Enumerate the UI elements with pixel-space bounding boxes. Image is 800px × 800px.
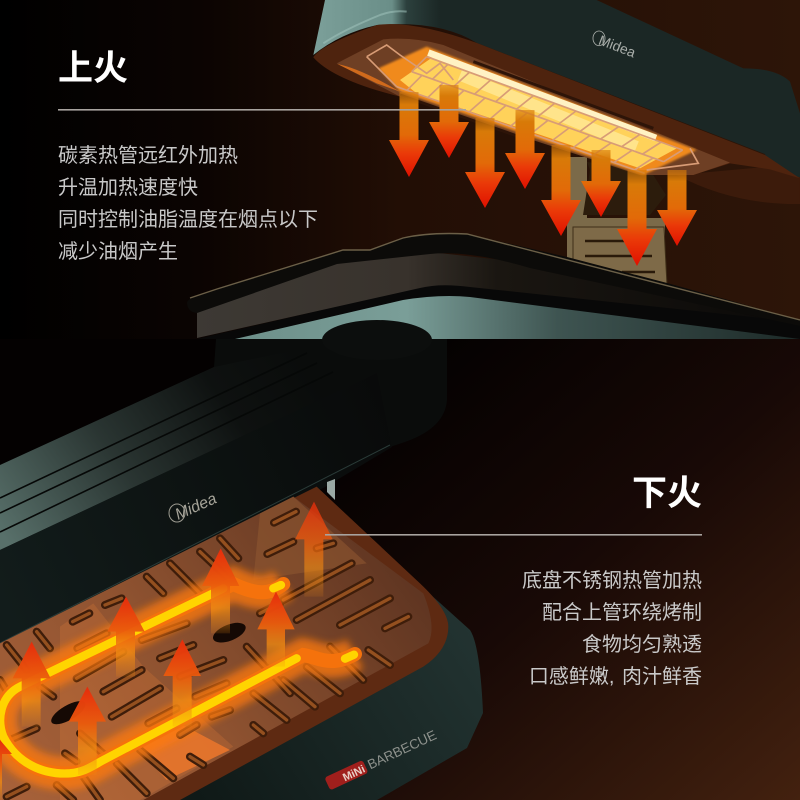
text block: upper description — [58, 144, 318, 263]
logo: Midea: Midea — [173, 490, 220, 524]
heating tube glow — [0, 584, 355, 773]
heater glow — [378, 47, 697, 175]
slots highlight — [0, 512, 408, 800]
text block: lower description: 配合上管环绕烤制 — [542, 601, 702, 624]
background: upper panel — [0, 0, 800, 339]
grill tray — [0, 487, 448, 800]
heater wire mesh — [367, 45, 698, 173]
text block: lower description: 食物均匀熟透 — [582, 633, 702, 656]
hinge disc — [322, 320, 432, 360]
recess orange reflection — [337, 64, 400, 92]
upper housing — [0, 320, 447, 645]
stand body behind arrows — [567, 157, 667, 285]
logo: Midea: Midea — [597, 32, 638, 61]
top face — [0, 345, 377, 550]
head copper lip — [313, 24, 800, 178]
lower grill lip and base — [187, 234, 800, 339]
arrows: upward heat — [0, 502, 333, 800]
black strip — [197, 284, 800, 339]
text block: lower description — [522, 569, 702, 688]
ribs — [0, 353, 333, 532]
text block: upper description: 同时控制油脂温度在烟点以下 — [58, 208, 318, 231]
grey side band — [197, 252, 800, 338]
housing outline — [0, 339, 447, 645]
tray lip highlight — [190, 234, 800, 320]
tray rim — [0, 487, 448, 800]
heading: 上火: 上火 — [58, 49, 128, 88]
arrows: downward heat — [389, 85, 697, 266]
text block: upper description: 升温加热速度快 — [58, 176, 198, 199]
base shell — [225, 295, 800, 339]
badge: MINI BARBECUE: BARBECUE — [365, 727, 439, 772]
heating tube core — [0, 585, 354, 773]
tray surface — [0, 497, 432, 800]
tray facet highlights — [60, 603, 233, 800]
text block: upper description: 碳素热管远红外加热 — [58, 144, 238, 167]
head shell — [313, 0, 800, 177]
panel: lower heat section — [0, 320, 800, 800]
front face — [0, 373, 392, 645]
badge: MINI BARBECUE: MiNi — [341, 763, 367, 784]
text block: lower description: 底盘不锈钢热管加热 — [522, 569, 702, 592]
divider: upper — [58, 109, 466, 111]
shell bevel highlight — [323, 11, 407, 43]
base housing — [170, 585, 483, 800]
tray holes — [210, 619, 248, 647]
text block: upper description: 减少油烟产生 — [58, 240, 178, 263]
upper heating head — [313, 0, 800, 204]
heating tube body — [0, 584, 355, 773]
support post — [327, 479, 335, 500]
heating tube — [428, 53, 656, 138]
divider: lower — [325, 534, 702, 536]
head underside right — [677, 167, 800, 204]
badge: MINI BARBECUE — [324, 727, 439, 791]
text block: lower description: 口感鲜嫩, 肉汁鲜香 — [529, 665, 702, 688]
background: lower panel — [0, 339, 800, 800]
recess — [337, 39, 730, 175]
slots dark — [0, 512, 408, 800]
panel: upper heat section — [0, 0, 800, 339]
tray lip — [187, 234, 800, 326]
recess dark slit — [400, 62, 653, 142]
heading: 下火: 下火 — [632, 474, 702, 513]
